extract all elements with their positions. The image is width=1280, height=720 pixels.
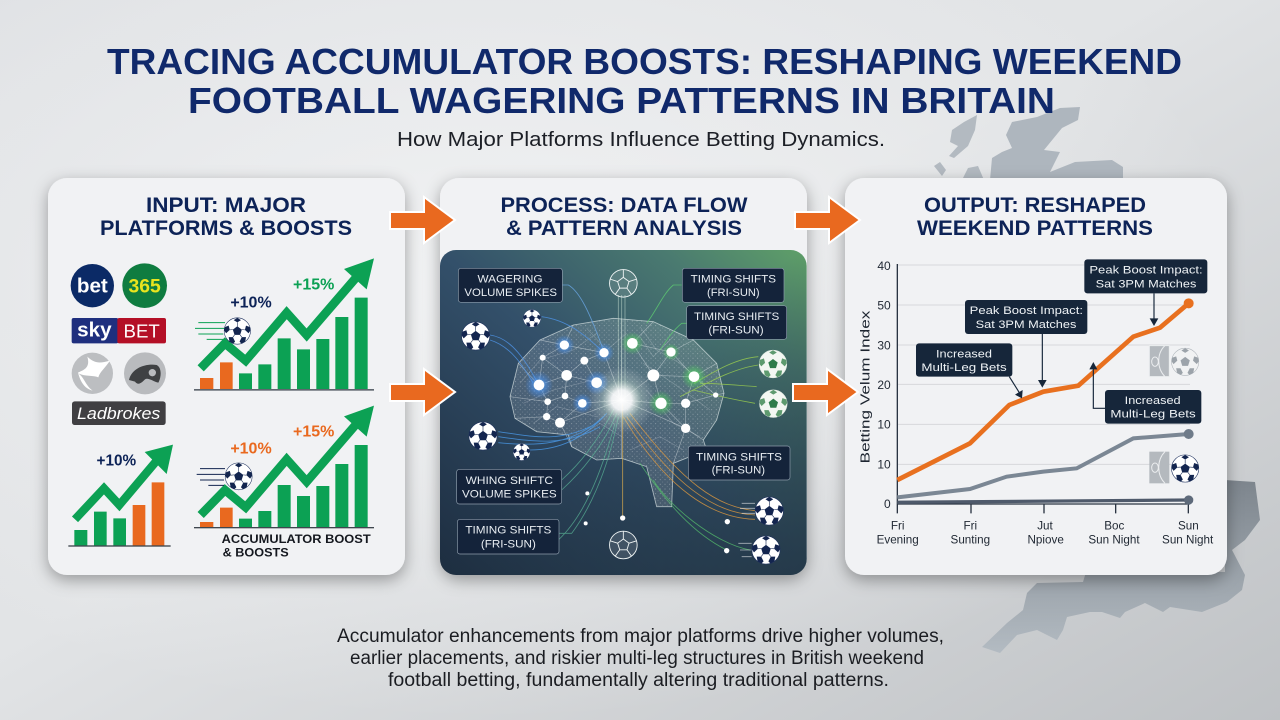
y axis labels: 20 [877, 378, 891, 392]
panel: process [440, 178, 807, 575]
y axis labels: 50 [877, 298, 891, 312]
brain [510, 318, 724, 507]
series: grey [897, 429, 1194, 497]
heading: input: INPUT: MAJOR [146, 194, 306, 217]
logo: ladbrokes [72, 401, 166, 425]
line chart [858, 259, 1214, 546]
callout: multi-leg bets left [916, 343, 1023, 398]
icon: pitch and grey ball [1149, 346, 1199, 377]
x axis labels: Fri [891, 519, 904, 532]
y axis labels: 30 [877, 338, 891, 352]
callout: multi-leg bets left: Multi-Leg Bets [921, 362, 1007, 374]
callout: peak boost impact middle: Sat 3PM Matches [976, 319, 1077, 331]
y axis labels: 40 [877, 259, 891, 273]
label: wagering volume spikes: WAGERING [477, 274, 542, 286]
logo: 365 [122, 263, 167, 308]
callout: peak boost impact middle: Peak Boost Impact: [970, 305, 1083, 317]
heading: output: WEEKEND PATTERNS [917, 217, 1153, 240]
logo: sky bet [72, 318, 166, 343]
logo: bet: bet [77, 274, 108, 297]
callout: multi-leg bets right: Increased [1125, 395, 1181, 407]
summary text: Accumulator enhancements from major platforms drive higher volumes, [337, 626, 944, 647]
label: timing shifts 3: TIMING SHIFTS [696, 451, 782, 463]
chart label [222, 532, 371, 560]
label: timing shifts 3 [688, 446, 790, 480]
label: timing shifts 1: (FRI-SUN) [707, 287, 760, 299]
label: whing shiftc volume spikes: WHING SHIFTC [466, 475, 553, 487]
label: timing shifts 4: TIMING SHIFTS [465, 525, 552, 537]
chart: small boost bars [68, 445, 173, 547]
logo: sky bet: BET [124, 320, 160, 341]
logo: ladbrokes: Ladbrokes [77, 404, 160, 423]
x axis labels: Sunting [951, 533, 990, 546]
label: timing shifts 1 [682, 268, 784, 302]
subtitle: How Major Platforms Influence Betting Dynamics. [397, 129, 885, 151]
chart: top boost bars: +15% [293, 276, 334, 293]
label: timing shifts 3: (FRI-SUN) [712, 465, 765, 477]
label: wagering volume spikes: VOLUME SPIKES [464, 287, 557, 299]
y axis labels: 0 [884, 497, 891, 511]
heading: output: OUTPUT: RESHAPED [924, 194, 1146, 217]
series: baseline [897, 495, 1193, 505]
title: TRACING ACCUMULATOR BOOSTS: RESHAPING WEEKEND [107, 41, 1182, 82]
chart: bottom boost bars [194, 406, 374, 528]
series: orange [897, 298, 1194, 480]
callout: peak boost impact right: Sat 3PM Matches [1096, 278, 1197, 290]
label: timing shifts 4: (FRI-SUN) [481, 538, 536, 550]
label: timing shifts 1: TIMING SHIFTS [691, 274, 776, 286]
x axis labels: Fri [964, 519, 977, 532]
arrow: input to process bottom [390, 369, 455, 415]
label: timing shifts 2: TIMING SHIFTS [694, 311, 780, 323]
label: timing shifts 2 [687, 306, 787, 339]
callout: multi-leg bets left: Increased [936, 348, 992, 360]
x axis labels: Sun Night [1162, 533, 1214, 546]
label: timing shifts 2: (FRI-SUN) [708, 324, 764, 336]
x axis labels: Jut [1037, 519, 1054, 532]
x axis labels: Evening [877, 533, 919, 546]
callout: multi-leg bets right: Multi-Leg Bets [1110, 409, 1196, 421]
neural diagram [440, 250, 807, 575]
icon: pitch and navy ball [1149, 452, 1199, 483]
football icons [462, 270, 787, 564]
map: britain silhouette [934, 107, 1260, 653]
chart: small boost bars: +10% [97, 453, 137, 470]
logo: grey mask [124, 352, 166, 394]
chart label: ACCUMULATOR BOOST [222, 532, 371, 546]
heading: output [917, 194, 1153, 240]
arrow: process to output bottom [793, 369, 858, 415]
chart: bottom boost bars: +10% [230, 440, 272, 457]
heading: process: PROCESS: DATA FLOW [500, 194, 748, 217]
heading: input [100, 194, 352, 240]
y axis labels: 10 [877, 457, 891, 471]
heading: process: & PATTERN ANALYSIS [506, 217, 742, 240]
x axis labels: Boc [1104, 519, 1125, 532]
y axis labels [877, 259, 891, 511]
logo: grey swoosh [72, 353, 113, 394]
axes and grid [897, 264, 1190, 513]
y axis labels: 10 [877, 418, 891, 432]
title: FOOTBALL WAGERING PATTERNS IN BRITAIN [188, 80, 1055, 121]
summary text: football betting, fundamentally altering traditional patterns. [388, 670, 889, 691]
title [107, 41, 1182, 121]
panel: output [845, 178, 1227, 575]
x axis labels: Sun [1178, 519, 1199, 532]
chart: bottom boost bars: +15% [293, 424, 334, 441]
nodes [525, 332, 730, 553]
x axis labels: Sun Night [1088, 533, 1140, 546]
label: whing shiftc volume spikes: VOLUME SPIKES [462, 488, 557, 500]
heading: process [500, 194, 748, 240]
panel: input [48, 178, 405, 575]
logo: 365: 365 [129, 276, 161, 297]
callout: peak boost impact right [1084, 259, 1207, 326]
label: whing shiftc volume spikes [457, 469, 562, 504]
summary text: earlier placements, and riskier multi-leg structures in British weekend [350, 648, 924, 669]
label: wagering volume spikes [458, 268, 562, 302]
chart label: & BOOSTS [223, 546, 289, 560]
x axis labels [877, 519, 1214, 546]
chart: top boost bars [194, 258, 374, 391]
chart: top boost bars: +10% [230, 295, 272, 312]
x axis labels: Npiove [1028, 533, 1064, 546]
callout: peak boost impact middle [965, 300, 1087, 388]
arrow: process to output top [795, 197, 860, 243]
heading: input: PLATFORMS & BOOSTS [100, 217, 352, 240]
label: timing shifts 4 [457, 519, 559, 554]
summary text [337, 626, 944, 691]
data flow lines [490, 285, 758, 557]
logo: sky bet: sky [77, 319, 112, 342]
callout: multi-leg bets right [1089, 362, 1201, 424]
logos and charts [68, 258, 374, 560]
y axis title: Betting Velum Index [858, 310, 872, 463]
logo: bet [71, 264, 114, 307]
callout: peak boost impact right: Peak Boost Impact: [1089, 265, 1203, 277]
arrow: input to process top [390, 197, 455, 243]
